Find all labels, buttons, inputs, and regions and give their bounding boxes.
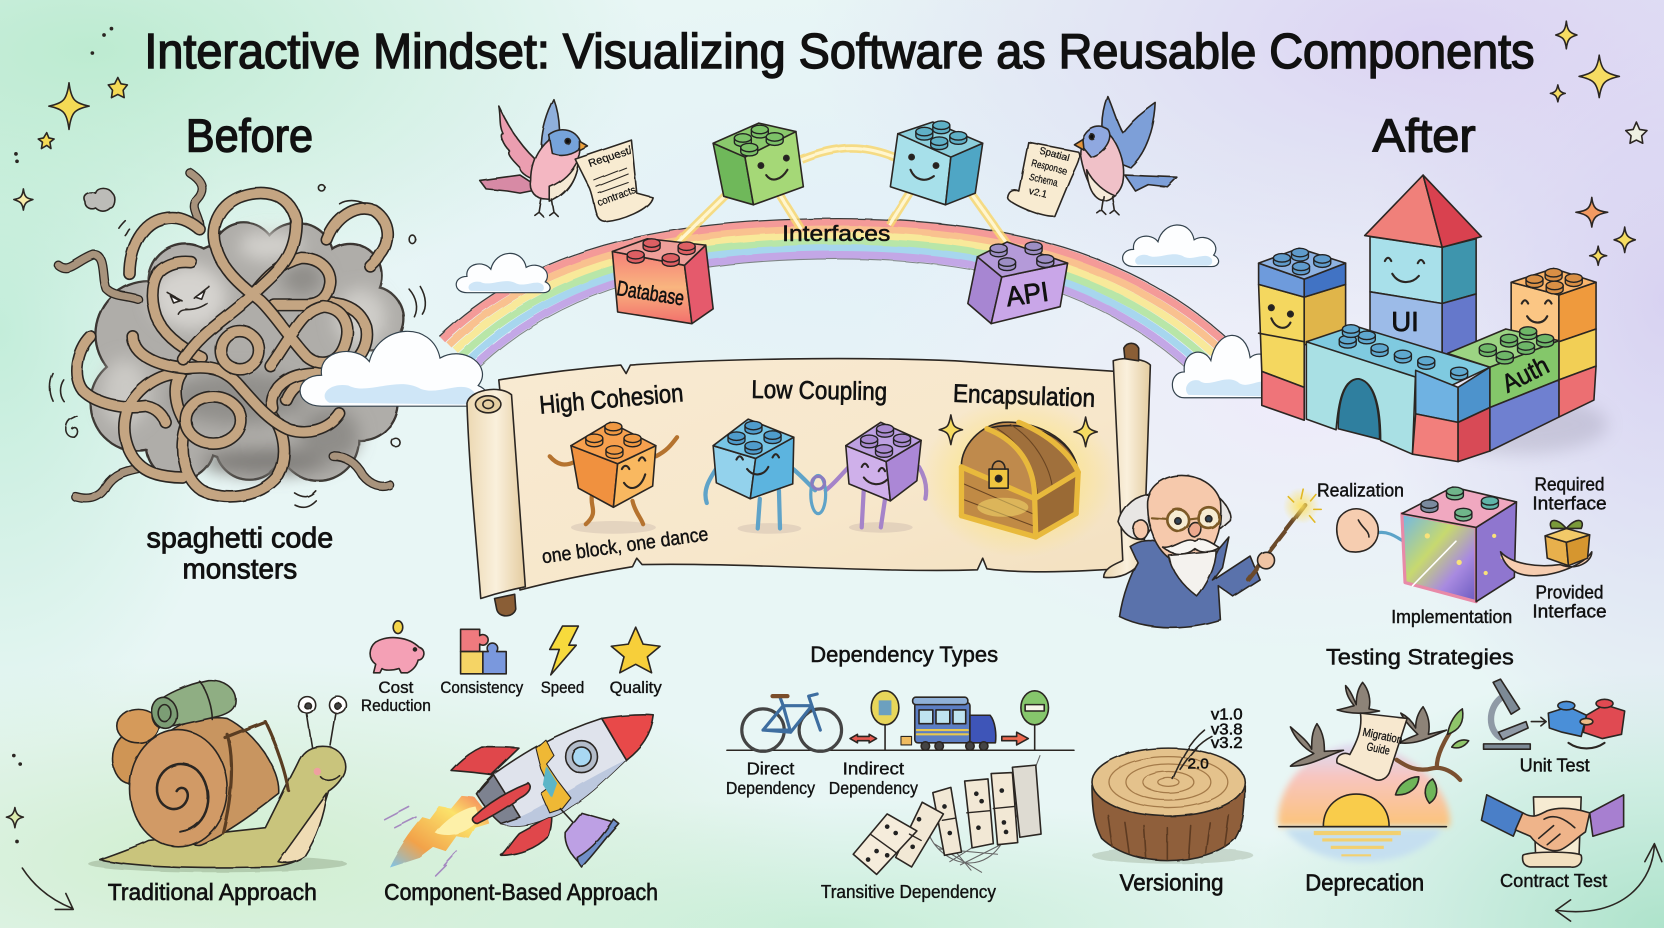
- arrow: bottom-left curl: [22, 868, 73, 909]
- sparkles around chest: [939, 415, 1097, 447]
- tangled noodles: [58, 173, 389, 498]
- bird wings and tail: [1102, 97, 1177, 191]
- backpack bags: [113, 733, 151, 784]
- section: deprecation sunset: [1278, 682, 1469, 895]
- label: indirect dependency: [829, 759, 918, 798]
- rocket fins: [451, 747, 519, 775]
- arrow: microscope to blocks: [1531, 717, 1546, 726]
- label: unit test: Unit Test: [1520, 755, 1590, 775]
- caption: spaghetti code monsters: monsters: [183, 553, 297, 585]
- bird wings and tail: [480, 100, 559, 193]
- icon: yellow signal: [871, 691, 899, 750]
- request scroll: contracts: [596, 184, 638, 209]
- heading: testing strategies: Testing Strategies: [1326, 644, 1514, 669]
- linked blue and purple blocks: [705, 419, 926, 534]
- snail shell: [167, 718, 279, 845]
- wizard head and hair: [1119, 475, 1230, 596]
- auth block: Auth: [1498, 351, 1554, 398]
- version labels: [1187, 706, 1243, 772]
- right pillar: [1511, 268, 1596, 417]
- heading: low coupling: Low Coupling: [751, 376, 887, 406]
- illustration: spaghetti code monster: [50, 173, 425, 507]
- block: blue smiling: [890, 121, 983, 205]
- response scroll: Schema: [1028, 172, 1060, 190]
- branch and leaves: [1395, 709, 1469, 803]
- benefits icon row: [361, 621, 662, 715]
- bird with response scroll: [1007, 97, 1177, 217]
- response scroll: Spatial: [1039, 146, 1070, 164]
- tree stump: [1092, 730, 1253, 864]
- label: required interface: [1532, 474, 1607, 513]
- center tower: UI: [1391, 306, 1419, 337]
- version labels: v3.8: [1211, 721, 1243, 738]
- left tower: [1259, 248, 1346, 420]
- icon: train: [901, 697, 996, 750]
- label: consistency: Consistency: [440, 678, 524, 697]
- block: database: Database: [615, 277, 686, 310]
- illustration: lego castle: [1259, 175, 1608, 462]
- label: contract test: Contract Test: [1500, 871, 1607, 891]
- block: database: [612, 239, 713, 324]
- panel: parchment scroll of principles: [467, 343, 1150, 616]
- label: indirect dependency: Indirect: [843, 759, 904, 779]
- label: component-based approach: Component-Based Approach: [384, 879, 658, 905]
- rainbow: [439, 219, 1231, 369]
- response scroll: v2.1: [1028, 186, 1049, 201]
- heading: dependency types: Dependency Types: [810, 642, 998, 667]
- label: traditional approach: Traditional Approach: [108, 879, 317, 905]
- block: api: [968, 242, 1068, 324]
- label: transitive dependency: Transitive Dependency: [821, 882, 996, 902]
- label: cost reduction: Cost: [378, 678, 414, 697]
- title: Interactive Mindset: Visualizing Software as Reusable Components: [144, 25, 1534, 79]
- response scroll: Response: [1030, 158, 1068, 178]
- dancing orange block: [550, 422, 677, 534]
- smoke puff: [84, 188, 115, 211]
- wizard pointing wand: [1119, 475, 1321, 627]
- decorative stars right: [1550, 21, 1647, 265]
- icon: star: [611, 627, 660, 673]
- implementation cube: [1402, 487, 1516, 602]
- label: quality: Quality: [610, 678, 662, 697]
- snail body: [100, 746, 346, 867]
- caption: spaghetti code monsters: [146, 523, 333, 585]
- motion marks: [50, 185, 425, 507]
- label: speed: Speed: [541, 678, 584, 697]
- icon: puzzle pieces: [461, 629, 506, 674]
- component patch: [536, 740, 571, 813]
- bird with request scroll: [480, 100, 653, 222]
- block: green smiling: [713, 123, 803, 205]
- label: direct dependency: [726, 759, 815, 798]
- auth block: [1447, 327, 1559, 451]
- rocket hull: [477, 718, 626, 826]
- sunset scene: [1278, 743, 1450, 862]
- section: dependency types: [726, 642, 1074, 902]
- label: realization: Realization: [1317, 481, 1404, 501]
- parchment sheet: [499, 359, 1135, 590]
- rocket flame: [389, 796, 489, 867]
- decorative stars left: [6, 28, 127, 843]
- gift on open hand: [1501, 520, 1592, 576]
- arrow: bottom-right curl: [1556, 844, 1662, 921]
- bird body: [1080, 129, 1124, 198]
- label: direct dependency: Direct: [747, 759, 794, 779]
- icon: bicycle: [742, 694, 842, 751]
- label: direct dependency: Dependency: [726, 778, 815, 798]
- icon: piggy bank: [370, 621, 424, 673]
- label: versioning: Versioning: [1120, 869, 1224, 895]
- section: traditional approach snail: [88, 680, 347, 905]
- label: cost reduction: [361, 678, 431, 715]
- right scroll roll: [1104, 343, 1150, 578]
- icon: handshake contract: [1481, 795, 1624, 867]
- diagram: component realization cube: [1317, 474, 1607, 627]
- label: provided interface: [1532, 583, 1607, 622]
- version labels: v3.2: [1211, 735, 1243, 752]
- icon: microscope: [1484, 679, 1530, 749]
- text: one block, one dance: one block, one dance: [541, 523, 710, 568]
- left scroll roll: [467, 389, 525, 616]
- arch block: [1306, 325, 1490, 454]
- heading: encapsulation: Encapsulation: [953, 380, 1096, 413]
- request scroll: [575, 140, 653, 222]
- label: indirect dependency: Dependency: [829, 778, 918, 798]
- wizard wand and hand: [1248, 488, 1321, 579]
- label: cost reduction: Reduction: [361, 696, 431, 715]
- arrow: red direct link: [850, 734, 877, 743]
- label: required interface: Interface: [1532, 493, 1607, 513]
- arrow: red indirect link: [1002, 732, 1028, 745]
- bird body: [530, 132, 580, 200]
- rocket: [384, 715, 654, 875]
- icon: falling dominoes: [853, 756, 1041, 874]
- monster smoke body: [90, 223, 403, 481]
- bedroll: [152, 680, 236, 728]
- section: component-based rocket: [384, 715, 658, 905]
- caption: spaghetti code monsters: spaghetti code: [146, 523, 333, 555]
- wizard robe: [1120, 537, 1260, 627]
- treasure chest: [921, 398, 1116, 557]
- migrating birds: [1290, 682, 1446, 766]
- response scroll: [1007, 142, 1079, 217]
- monster angry face: [168, 287, 209, 314]
- track line: [727, 749, 1074, 751]
- label: provided interface: Interface: [1532, 602, 1607, 622]
- label: required interface: Required: [1534, 474, 1605, 494]
- section: versioning tree stump: [1092, 706, 1253, 895]
- purple bag: [566, 813, 619, 865]
- version labels: 2.0: [1187, 756, 1209, 772]
- center tower: [1365, 175, 1481, 361]
- migration guide scroll: [1337, 713, 1407, 780]
- migration guide scroll: Migration: [1361, 726, 1403, 747]
- snail: [88, 680, 347, 872]
- clouds: [300, 225, 1277, 406]
- block: api: API: [1004, 276, 1050, 312]
- icon: unit test blocks: [1548, 699, 1625, 748]
- heading: high cohesion: High Cohesion: [538, 379, 684, 420]
- heading: after: After: [1373, 110, 1476, 162]
- glowing interface beams: [674, 148, 1010, 248]
- icon: green signal: [1021, 691, 1048, 750]
- label: provided interface: Provided: [1536, 583, 1603, 603]
- migration guide scroll: Guide: [1365, 740, 1391, 758]
- request scroll: Request/: [587, 144, 633, 170]
- heading: before: Before: [186, 110, 313, 162]
- version labels: v1.0: [1211, 706, 1243, 723]
- label: deprecation: Deprecation: [1305, 869, 1424, 895]
- icon: lightning bolt: [550, 626, 578, 675]
- label: implementation: Implementation: [1391, 607, 1512, 627]
- lower right blocks: [1412, 367, 1490, 462]
- label: interfaces: Interfaces: [782, 221, 890, 246]
- realization fist: [1337, 509, 1407, 552]
- section: testing strategies: [1326, 644, 1625, 891]
